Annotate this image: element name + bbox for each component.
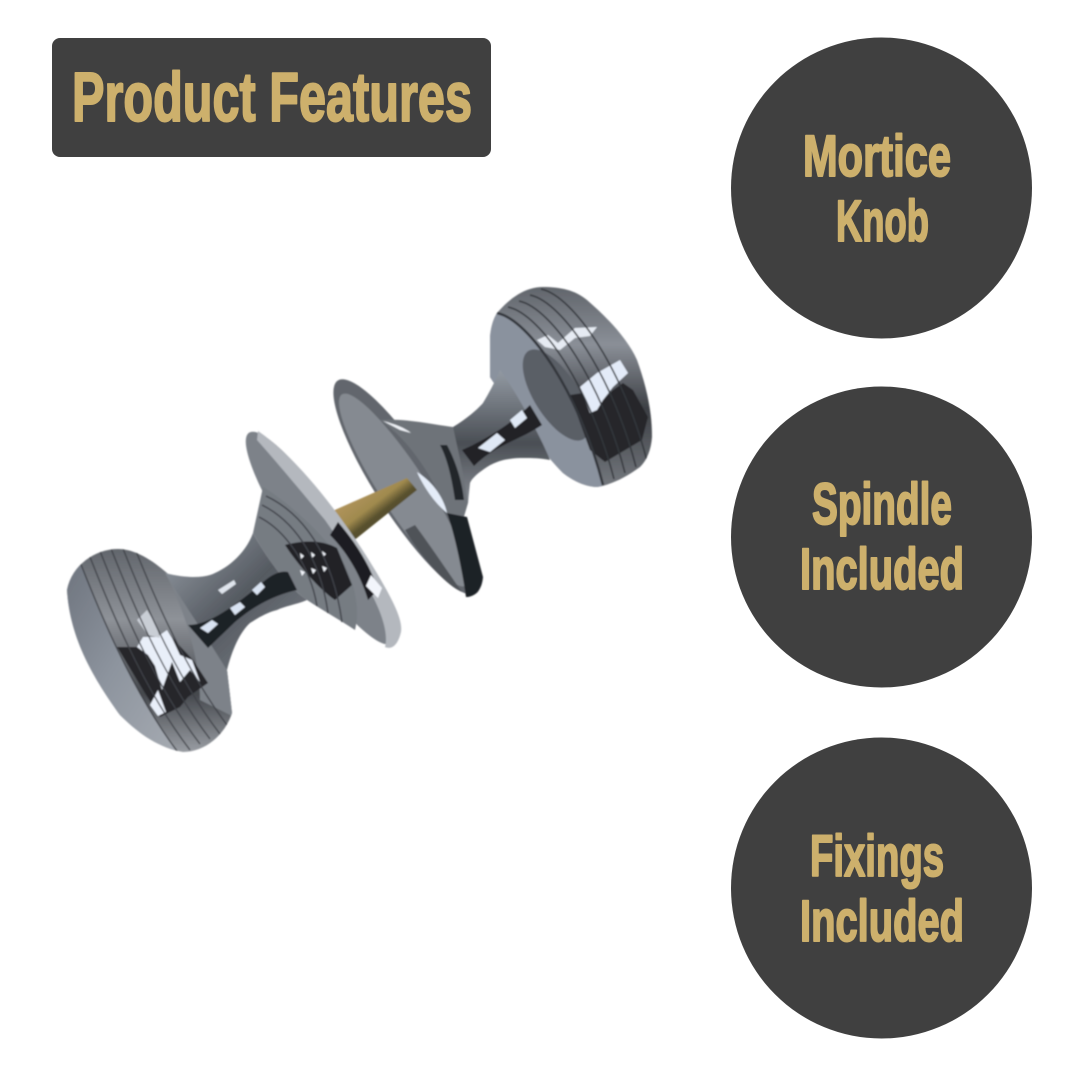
header: Product Features [52, 38, 491, 157]
left rose plate [227, 418, 413, 658]
right knob head [489, 286, 653, 488]
circle: Mortice Knob: Knob [836, 189, 929, 254]
circle: Mortice Knob: Mortice [803, 124, 951, 189]
circle: Spindle Included: Included [800, 537, 964, 602]
circle: Mortice Knob [731, 38, 1032, 338]
right knob neck [453, 370, 550, 503]
product image: mortice door knob set [60, 280, 660, 757]
circle: Fixings Included: Included [800, 889, 964, 954]
circle: Spindle Included [731, 386, 1032, 688]
left knob neck [165, 533, 307, 670]
circle: Fixings Included: Fixings [810, 824, 944, 889]
circle: Fixings Included [731, 738, 1032, 1038]
right rose plate disc [313, 364, 501, 610]
left rose cone [253, 487, 357, 630]
right rose cone and rim [380, 420, 483, 597]
left knob head [66, 548, 233, 753]
circle: Spindle Included: Spindle [812, 472, 952, 537]
spindle [328, 478, 417, 546]
header: Product Features: Product Features [72, 58, 472, 136]
